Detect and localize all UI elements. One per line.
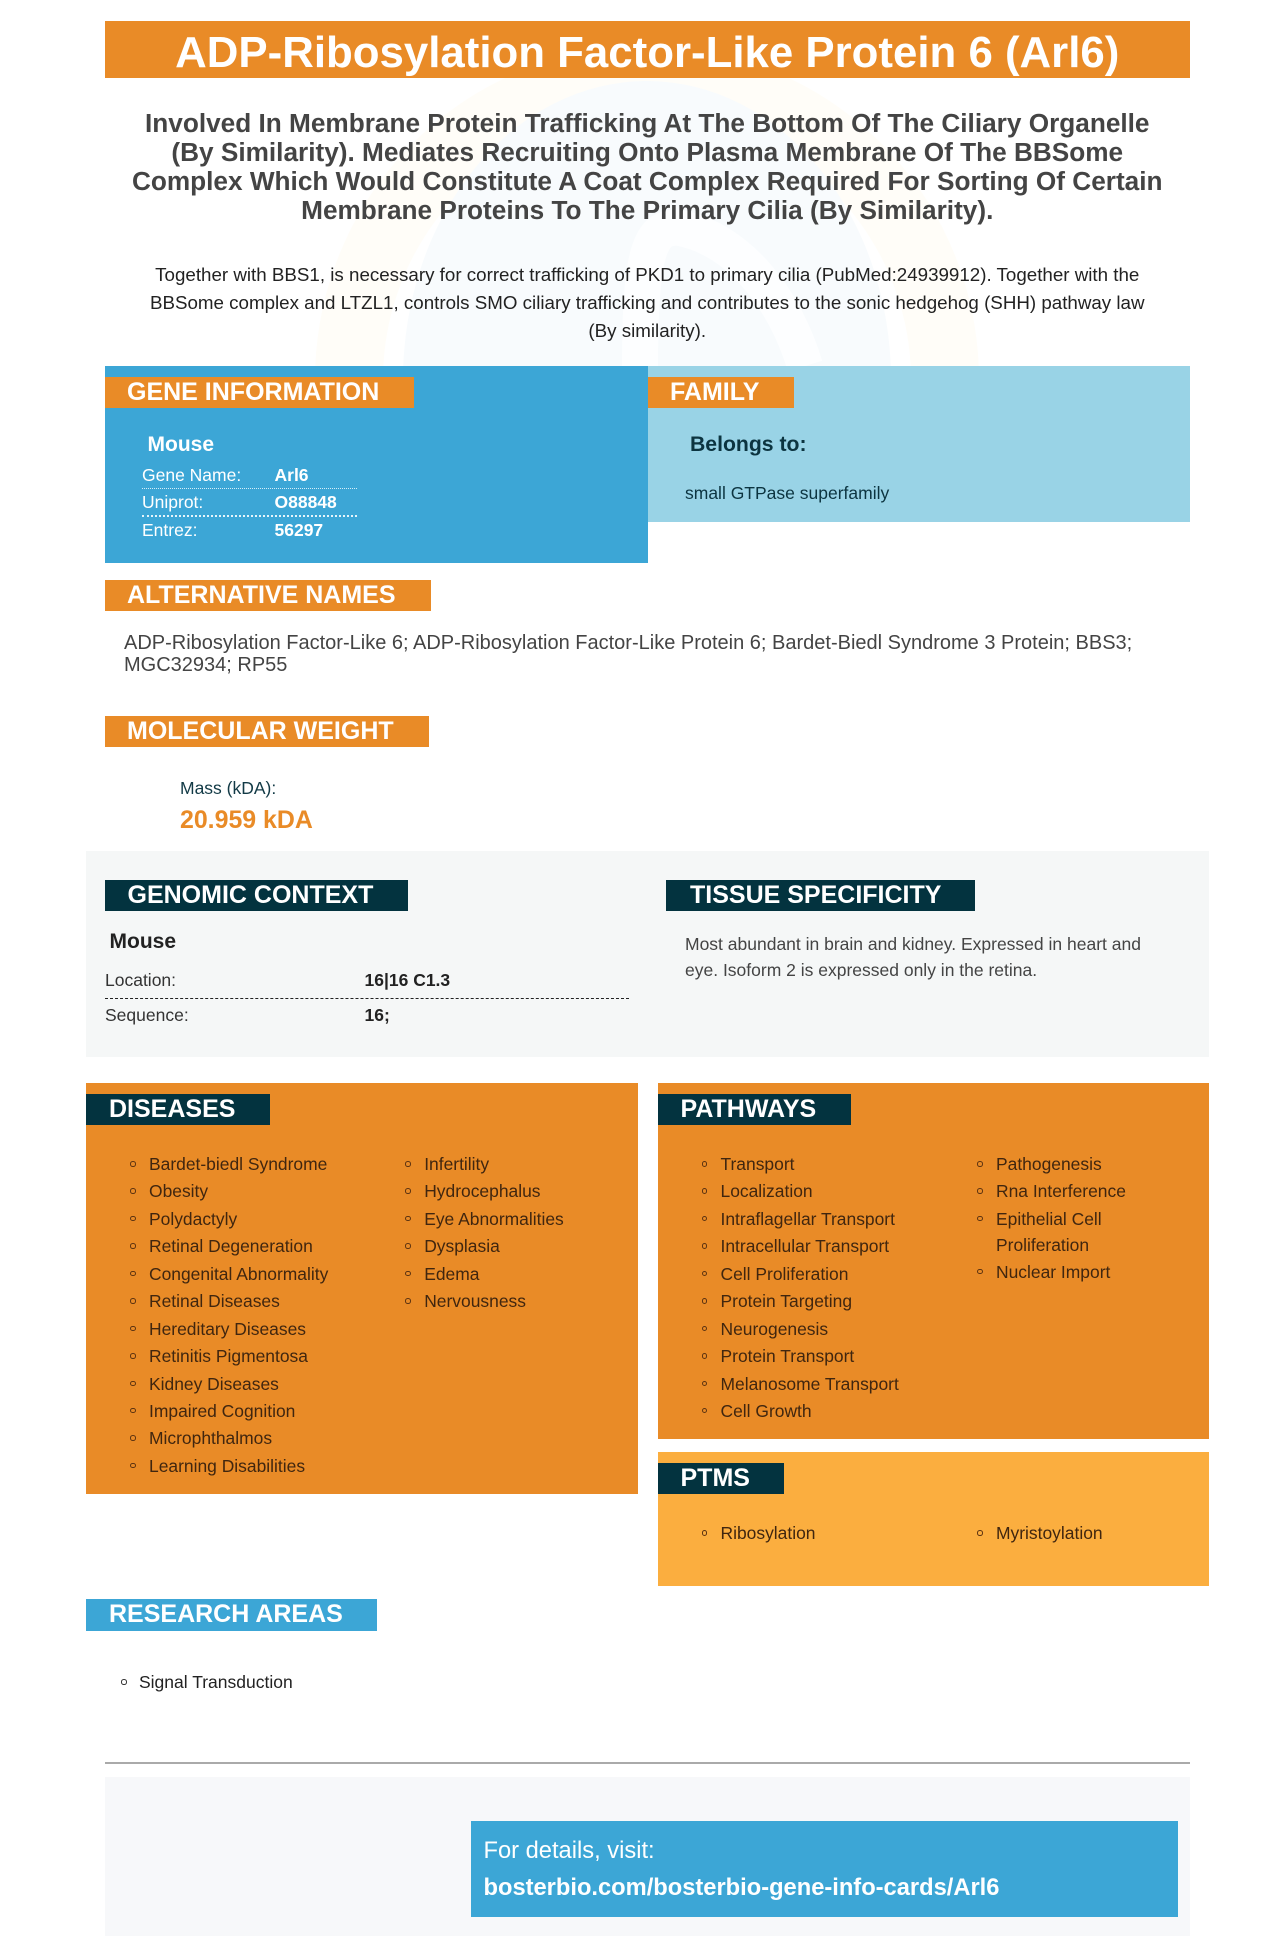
row: sequence: 16; — [364, 1005, 390, 1025]
panel: footer — [105, 1777, 1190, 1936]
row: sequence — [105, 1005, 390, 1025]
heading: ptms — [658, 1463, 784, 1494]
disease list column 2: Eye Abnormalities — [424, 1209, 564, 1229]
description paragraph: BBSome complex and LTZL1, controls SMO ciliary trafficking and contributes to the sonic hedgehog (SHH) pathway law — [150, 292, 1145, 313]
belongs to label: Belongs to: — [690, 433, 807, 456]
row: gene name: Arl6 — [274, 465, 309, 485]
disease list column 1: Hereditary Diseases — [149, 1319, 306, 1339]
mass label: Mass (kDA): — [180, 778, 276, 798]
pathway list column 2: Nuclear Import — [996, 1262, 1110, 1282]
row: location: Location: — [105, 970, 176, 990]
details label: For details, visit: — [484, 1838, 655, 1864]
subtitle summary: Membrane Proteins To The Primary Cilia (By Similarity). — [301, 195, 993, 225]
pathway list column 1: Protein Targeting — [720, 1291, 852, 1311]
row: entrez: 56297 — [274, 520, 323, 540]
heading: research areas: RESEARCH AREAS — [109, 1600, 343, 1628]
heading: gene information: GENE INFORMATION — [127, 378, 379, 406]
species label: Mouse — [148, 433, 214, 456]
disease list column 2: Nervousness — [424, 1291, 526, 1311]
disease list column 2: Edema — [424, 1264, 479, 1284]
pathway list column 1: Cell Growth — [720, 1401, 812, 1421]
pathway list column 1: Intracellular Transport — [720, 1236, 889, 1256]
disease list column 1: Bardet-biedl Syndrome — [149, 1154, 327, 1174]
heading: genomic context: GENOMIC CONTEXT — [128, 881, 373, 909]
disease list column 1: Kidney Diseases — [149, 1374, 279, 1394]
disease list column 2: Dysplasia — [424, 1236, 500, 1256]
panel: diseases — [86, 1083, 638, 1494]
disease list column 1: Polydactyly — [149, 1209, 237, 1229]
subtitle summary: Involved In Membrane Protein Trafficking At The Bottom Of The Ciliary Organelle — [145, 108, 1150, 138]
heading: tissue specificity: TISSUE SPECIFICITY — [690, 881, 941, 909]
pathway list column 2: Epithelial Cell — [996, 1209, 1102, 1229]
disease list column 1: Impaired Cognition — [149, 1401, 295, 1421]
disease list column 1: Retinal Degeneration — [149, 1236, 313, 1256]
heading: diseases — [86, 1094, 270, 1125]
heading: family: FAMILY — [670, 378, 759, 406]
heading: alternative names: ALTERNATIVE NAMES — [127, 581, 396, 609]
pathway list column 1: Cell Proliferation — [720, 1264, 848, 1284]
row: gene name: Gene Name: — [142, 465, 241, 485]
ptm list column 2: Myristoylation — [996, 1523, 1103, 1543]
row: entrez: Entrez: — [142, 520, 197, 540]
disease list column 1: Congenital Abnormality — [149, 1264, 328, 1284]
disease list column 1: Microphthalmos — [149, 1428, 272, 1448]
row: uniprot — [142, 492, 337, 512]
pathway list column 1: Localization — [720, 1181, 813, 1201]
callout: details link — [471, 1821, 1178, 1917]
description paragraph: (By similarity). — [588, 320, 706, 341]
panel: family — [648, 366, 1190, 522]
subtitle summary: (By Similarity). Mediates Recruiting Onto Plasma Membrane Of The BBSome — [171, 137, 1123, 167]
species label: Mouse — [110, 930, 176, 953]
pathway list column 1 — [702, 1154, 899, 1421]
heading: ptms: PTMS — [680, 1464, 750, 1492]
research areas list: Signal Transduction — [139, 1672, 293, 1692]
row: sequence: Sequence: — [105, 1005, 189, 1025]
ptm list column 1: Ribosylation — [720, 1523, 816, 1543]
row: gene name — [142, 465, 309, 485]
description paragraph: Together with BBS1, is necessary for correct trafficking of PKD1 to primary cilia (PubMed:24939912). Together with the — [155, 264, 1139, 285]
tissue specificity text — [685, 934, 1141, 980]
pathway list column 2: Pathogenesis — [996, 1154, 1102, 1174]
row: uniprot: Uniprot: — [142, 492, 203, 512]
row: location: 16|16 C1.3 — [364, 970, 450, 990]
alternative names text: MGC32934; RP55 — [124, 654, 287, 676]
disease list column 2: Infertility — [424, 1154, 489, 1174]
pathway list column 1: Neurogenesis — [720, 1319, 828, 1339]
family value: small GTPase superfamily — [685, 483, 889, 503]
mass value: 20.959 kDA — [180, 806, 313, 834]
description paragraph — [150, 264, 1145, 341]
pathway list column 2: Proliferation — [996, 1235, 1089, 1255]
title banner: ADP-Ribosylation Factor-Like Protein 6 (Arl6) — [175, 28, 1119, 77]
panel: genomic context and tissue specificity — [86, 851, 1209, 1057]
panel: ptms — [658, 1452, 1209, 1586]
pathway list column 2: Rna Interference — [996, 1181, 1126, 1201]
disease list column 2: Hydrocephalus — [424, 1181, 541, 1201]
subtitle summary — [132, 108, 1163, 225]
disease list column 1 — [130, 1154, 328, 1476]
pathway list column 1: Melanosome Transport — [720, 1374, 899, 1394]
disease list column 1: Obesity — [149, 1181, 208, 1201]
pathway list column 1: Protein Transport — [720, 1346, 854, 1366]
disease list column 1: Learning Disabilities — [149, 1456, 305, 1476]
disease list column 1: Retinitis Pigmentosa — [149, 1346, 308, 1366]
tissue specificity text: eye. Isoform 2 is expressed only in the retina. — [685, 960, 1037, 980]
row: entrez — [142, 520, 323, 540]
panel: gene information — [105, 366, 648, 563]
panel: pathways — [658, 1083, 1209, 1439]
heading: molecular weight: MOLECULAR WEIGHT — [127, 717, 394, 745]
tissue specificity text: Most abundant in brain and kidney. Expressed in heart and — [685, 934, 1141, 954]
disease list column 1: Retinal Diseases — [149, 1291, 280, 1311]
heading: family — [648, 377, 794, 408]
heading: pathways — [658, 1094, 851, 1125]
row: location — [105, 970, 450, 990]
pathway list column 1: Intraflagellar Transport — [720, 1209, 895, 1229]
subtitle summary: Complex Which Would Constitute A Coat Complex Required For Sorting Of Certain — [132, 166, 1163, 196]
background watermark logo — [300, 78, 1000, 366]
pathway list column 2 — [977, 1154, 1126, 1282]
pathway list column 1: Transport — [720, 1154, 794, 1174]
details url: bosterbio.com/bosterbio-gene-info-cards/Arl6 — [484, 1875, 999, 1901]
alternative names text: ADP-Ribosylation Factor-Like 6; ADP-Ribosylation Factor-Like Protein 6; Bardet-Biedl Syndrome 3 Protein; BBS3; — [124, 632, 1132, 654]
disease list column 2 — [405, 1154, 564, 1311]
alternative names text — [124, 632, 1132, 676]
row: uniprot: O88848 — [274, 492, 337, 512]
heading: pathways: PATHWAYS — [680, 1095, 816, 1123]
heading: diseases: DISEASES — [109, 1095, 235, 1123]
